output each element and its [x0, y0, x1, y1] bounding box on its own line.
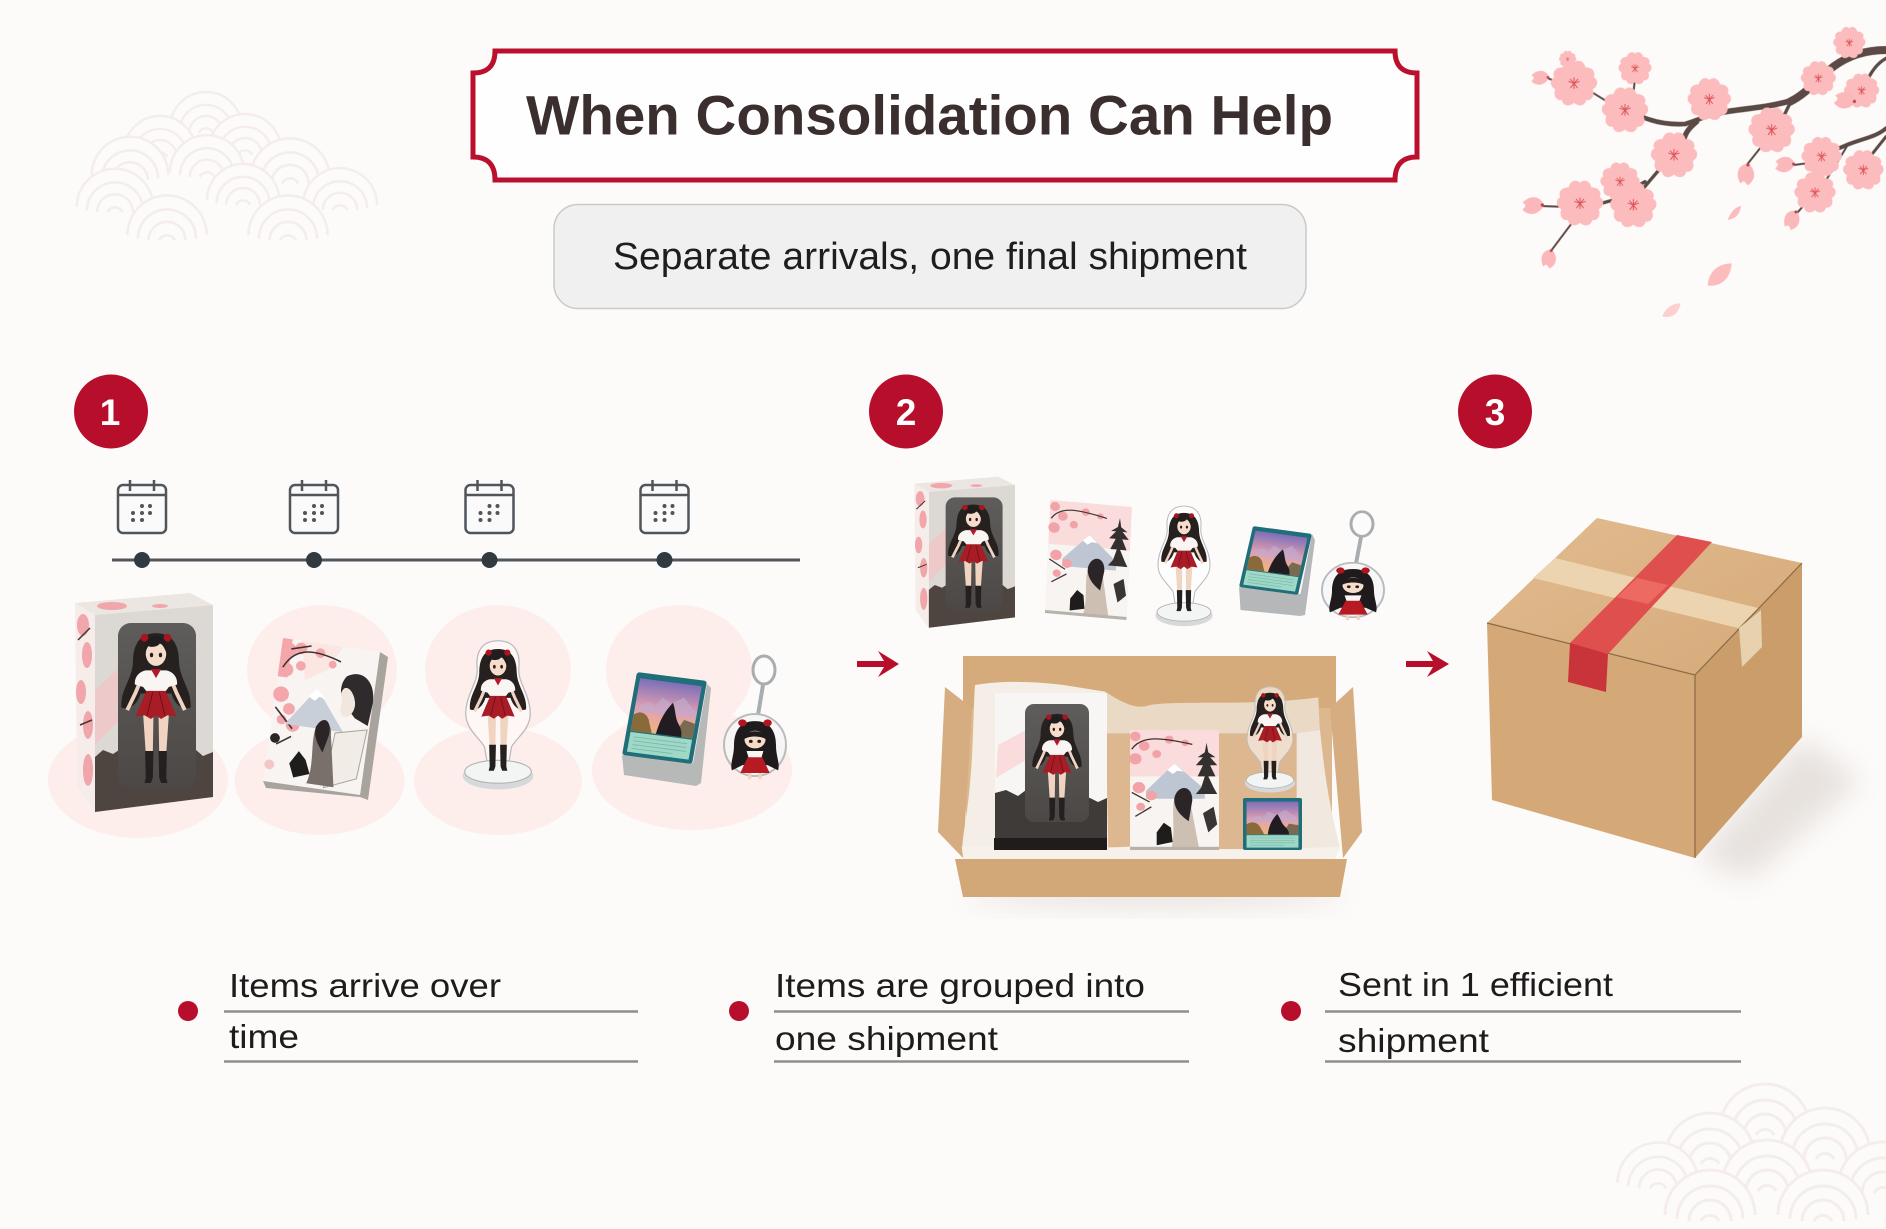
- subtitle pill: [554, 204, 1306, 308]
- calendar icons: [118, 480, 688, 533]
- caption 2: one shipment: [775, 1020, 998, 1057]
- card in carton: [1243, 798, 1302, 850]
- tissue paper: [962, 682, 1340, 859]
- step 2 badge: 2: [896, 392, 916, 433]
- caption 1: Items arrive over: [229, 967, 501, 1004]
- decorative wave pattern: bottom right: [1618, 1084, 1886, 1229]
- step 3 badge: 3: [1485, 392, 1505, 433]
- arrival timeline: [112, 552, 800, 568]
- caption 2: Items are grouped into: [775, 967, 1145, 1004]
- falling petals: [1662, 206, 1741, 317]
- book in carton: [1129, 730, 1219, 850]
- trading card deck: [622, 672, 711, 786]
- caption 3: Sent in 1 efficient: [1338, 966, 1613, 1003]
- side flaps: [938, 687, 972, 858]
- box floor: [966, 708, 1332, 858]
- step 1 badge: 1: [100, 392, 120, 433]
- boxed figure small: [914, 477, 1015, 628]
- caption 1: [178, 967, 638, 1062]
- acrylic stand small: [1155, 506, 1213, 626]
- carton right face: [1695, 563, 1802, 858]
- step 3 badge: [1458, 374, 1532, 448]
- title text: When Consolidation Can Help: [526, 84, 1333, 146]
- acrylic stand: [463, 641, 533, 789]
- boxed figure: [75, 593, 213, 812]
- decorative wave pattern: top left: [77, 92, 377, 247]
- caption 3: [1281, 966, 1741, 1062]
- sealed carton: [1487, 518, 1862, 880]
- clear tape: [1533, 558, 1762, 667]
- step 1 badge: [74, 374, 148, 448]
- cherry blossom branch: [1522, 27, 1886, 317]
- open shipping box: [938, 656, 1362, 907]
- caption 3: shipment: [1338, 1022, 1489, 1059]
- acrylic keychain: [724, 656, 786, 779]
- carton left face: [1487, 623, 1695, 858]
- pink backdrop circles: [48, 605, 792, 838]
- step 2 badge: [869, 374, 943, 448]
- blossoms: [1522, 27, 1885, 270]
- box back flap: [963, 656, 1336, 710]
- book small: [1044, 500, 1132, 620]
- keychain small: [1322, 512, 1384, 620]
- caption 1: time: [229, 1018, 299, 1055]
- caption 2: [729, 967, 1189, 1062]
- stand in carton: [1245, 687, 1295, 793]
- box shadow: [965, 883, 1345, 907]
- boxed figure in carton: [994, 693, 1107, 850]
- title frame: [473, 51, 1417, 180]
- grouped items row: [914, 477, 1384, 628]
- card deck small: [1239, 526, 1315, 616]
- box front panel: [955, 859, 1347, 897]
- subtitle text: Separate arrivals, one final shipment: [613, 236, 1247, 278]
- arrow: step 1 to step 2: [857, 651, 899, 677]
- red tape: [1568, 535, 1712, 692]
- illustrated book: [261, 638, 388, 800]
- arrow: step 2 to step 3: [1406, 651, 1449, 677]
- carton top face: [1487, 518, 1802, 675]
- carton shadow: [1695, 737, 1862, 880]
